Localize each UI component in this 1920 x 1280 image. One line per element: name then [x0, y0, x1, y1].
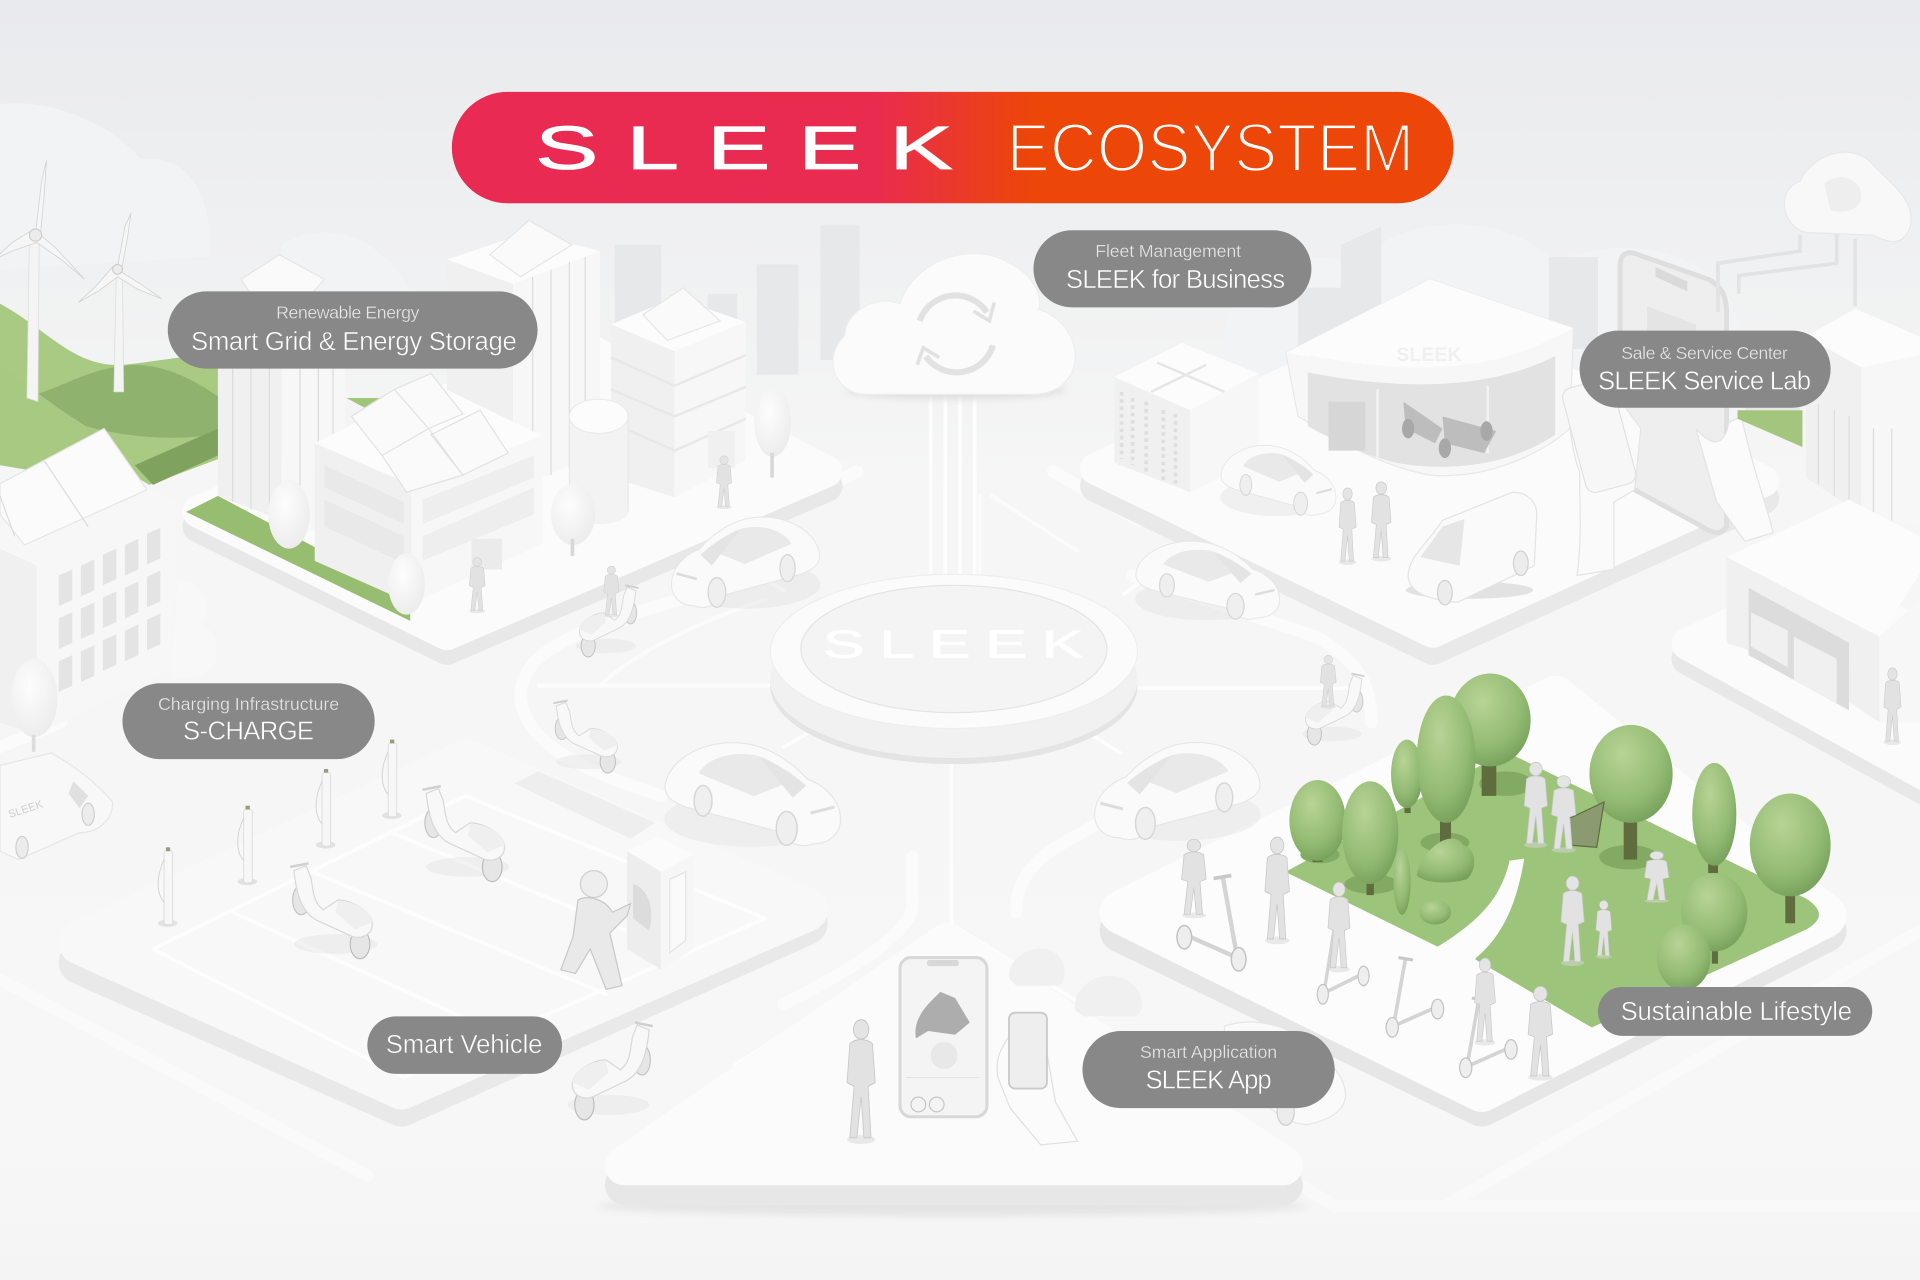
parked scooters [290, 786, 509, 959]
showroom sign: SLEEK [1396, 344, 1462, 366]
label: smart grid: Renewable Energy [276, 302, 420, 322]
scooter near smart vehicle [568, 1022, 653, 1120]
chargers [158, 740, 402, 927]
label: charging: Charging Infrastructure [158, 694, 339, 714]
cars on road [664, 517, 1280, 847]
windows [59, 528, 160, 692]
background skyline [615, 225, 1800, 410]
building: far right towers [1738, 309, 1920, 527]
building: front office [315, 373, 542, 604]
platform: smart grid [198, 343, 827, 649]
central cloud [833, 253, 1075, 399]
hand left [1565, 382, 1641, 576]
park lawn [1288, 753, 1818, 1026]
label: service lab [1580, 331, 1831, 408]
battery swap station and rider [561, 836, 693, 989]
bushes [1393, 849, 1411, 915]
label: fleet management: SLEEK for Business [1066, 266, 1285, 294]
label: service lab: Sale & Service Center [1621, 343, 1788, 363]
label: charging [122, 683, 375, 759]
solar panels [0, 429, 147, 545]
white tree: left cluster [11, 581, 218, 752]
label: smart vehicle [367, 1016, 562, 1074]
building: service garage [1727, 500, 1920, 745]
platform: service lab [1096, 316, 1763, 649]
label: smart grid: Smart Grid & Energy Storage [191, 328, 517, 356]
park trees [1289, 673, 1831, 991]
label: sustainable lifestyle [1598, 987, 1872, 1036]
hub [770, 574, 1138, 764]
label: fleet management [1033, 230, 1311, 307]
park visitors [1561, 851, 1669, 966]
people: grid platform [469, 456, 732, 613]
label: sustainable lifestyle: Sustainable Lifestyle [1621, 998, 1852, 1026]
scooters in showroom [1402, 402, 1496, 458]
background clouds [0, 103, 1739, 404]
title text: ECOSYSTEM [1007, 109, 1414, 186]
label: fleet management: Fleet Management [1095, 241, 1241, 261]
icon: hand with phone [997, 1013, 1078, 1145]
hand right [1696, 416, 1773, 541]
label: smart app [1082, 1031, 1335, 1108]
car behind app label [1224, 1022, 1346, 1125]
platform: park [1122, 698, 1824, 1104]
building: left apartment [0, 429, 175, 735]
background vehicle: van left [0, 753, 113, 860]
people on bench [1524, 762, 1604, 853]
windows [324, 465, 404, 563]
battery storage cylinder [569, 399, 628, 524]
icon: sync arrows [917, 295, 994, 372]
icon: large phone and hands [1560, 253, 1773, 576]
title banner [452, 92, 1453, 203]
platform: far right service [1687, 585, 1920, 808]
label: smart app: SLEEK App [1146, 1067, 1272, 1095]
people at service lab [1339, 482, 1391, 565]
small clouds [1009, 948, 1142, 1016]
green hills [0, 304, 392, 485]
green strip: grid platform [186, 496, 410, 621]
icon: app phone [900, 958, 987, 1117]
solar panel [241, 255, 324, 300]
building: tall left tower [218, 255, 345, 545]
cloud with data lines [1718, 152, 1911, 312]
scooters on road [553, 566, 1365, 773]
van [1406, 492, 1537, 605]
building: tall back tower [447, 220, 600, 490]
label: smart vehicle: Smart Vehicle [386, 1031, 542, 1059]
car on service platform [1220, 445, 1336, 516]
label: smart app: Smart Application [1140, 1042, 1277, 1062]
solar panel [643, 288, 720, 340]
label: charging: S-CHARGE [183, 718, 314, 746]
app user [847, 1020, 875, 1144]
logo wordmark: SLEEK [535, 114, 953, 182]
label: smart grid [168, 291, 538, 369]
solar panel [490, 220, 572, 277]
wind turbines [0, 160, 162, 402]
platform: app [598, 943, 1308, 1216]
building: showroom [1286, 279, 1573, 476]
solar panels [351, 373, 508, 492]
hub logo: SLEEK [823, 623, 1084, 667]
label: service lab: SLEEK Service Lab [1598, 367, 1811, 395]
road network [0, 394, 1920, 1206]
background vehicle: van left: SLEEK [7, 798, 45, 821]
building: server racks [1114, 343, 1259, 492]
kick scooter riders [1177, 837, 1553, 1081]
platform: charging [81, 762, 806, 1104]
white trees: grid platform [268, 388, 791, 615]
building: right tower [611, 288, 746, 497]
